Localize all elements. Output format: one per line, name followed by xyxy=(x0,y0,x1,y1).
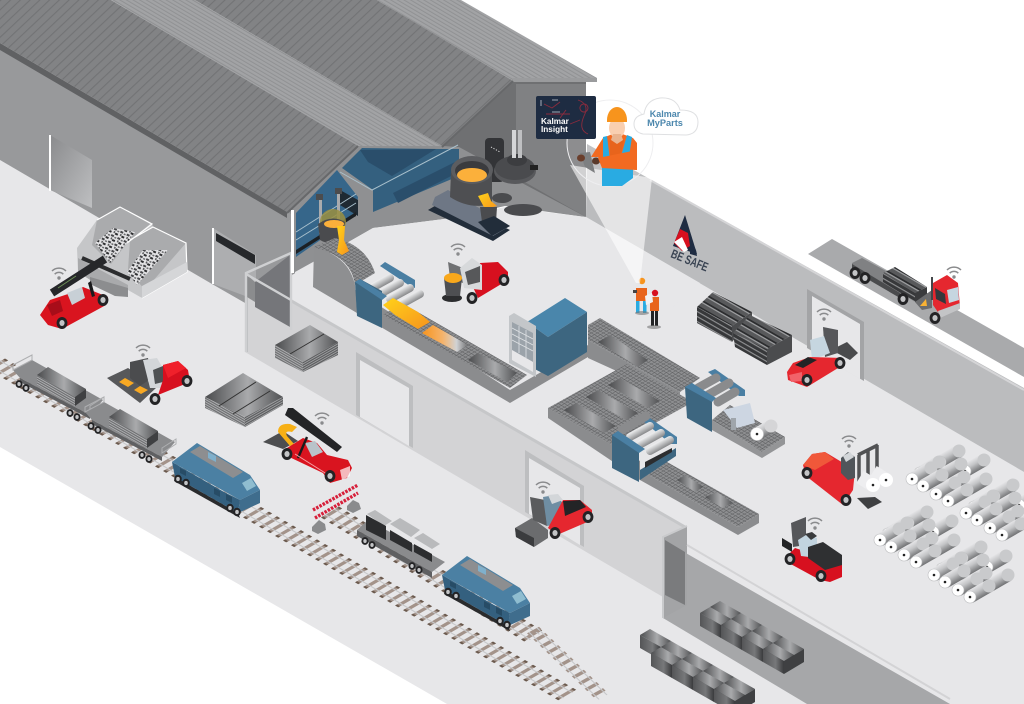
wifi icon xyxy=(536,482,550,494)
roof eave xyxy=(0,43,287,218)
production line: caster conveyor xyxy=(355,262,588,403)
barrier xyxy=(312,485,361,534)
technician callout xyxy=(536,96,698,186)
ladle furnace xyxy=(428,130,542,241)
wifi icon xyxy=(947,267,961,279)
roof upper strip xyxy=(377,0,597,82)
kalmar myparts cloud: MyParts xyxy=(647,118,683,128)
steel bar stacks xyxy=(697,292,792,365)
forklift at right door xyxy=(787,327,858,387)
slab field conveyor xyxy=(548,364,693,446)
wall highlight top xyxy=(650,180,1024,390)
steel block row lower xyxy=(640,629,755,704)
locomotive one xyxy=(172,443,260,518)
black tower and lid xyxy=(485,130,538,184)
wifi icon xyxy=(808,518,822,530)
ladle with molten steel at caster xyxy=(316,188,346,243)
roof panel left xyxy=(0,0,358,212)
continuous caster ramp xyxy=(313,226,375,313)
worker pair xyxy=(633,278,661,329)
wifi icon xyxy=(817,309,831,321)
wifi icon xyxy=(52,268,66,280)
wagon one xyxy=(13,355,104,421)
wifi icon xyxy=(842,436,856,448)
coil pile two xyxy=(960,478,1024,541)
truck on road xyxy=(850,258,960,324)
rolling stand right xyxy=(685,369,755,432)
railway track branch xyxy=(322,507,543,642)
kalmar insight card xyxy=(536,96,596,139)
ground floor xyxy=(0,160,1024,704)
kalmar myparts cloud xyxy=(634,98,698,135)
forklift carrying ladle xyxy=(442,258,509,304)
railway track main xyxy=(0,350,576,700)
spotlight cone xyxy=(570,165,652,283)
kalmar insight card: Kalmar xyxy=(541,117,570,126)
railway switch segment xyxy=(529,628,607,699)
roof gable edges xyxy=(287,81,513,213)
forklift carrying coils xyxy=(802,445,893,509)
lower conveyor xyxy=(640,458,759,527)
finished coil xyxy=(750,420,778,440)
outer storage wall xyxy=(663,540,950,704)
roof valley strip xyxy=(111,0,442,146)
access road xyxy=(808,239,1024,377)
wifi icon xyxy=(451,244,465,256)
reachstacker with grapple xyxy=(263,408,352,483)
coil pile one xyxy=(906,444,992,507)
loading door middle xyxy=(212,228,256,300)
callout circle xyxy=(567,100,653,186)
building: steel mill hall xyxy=(0,0,700,440)
perimeter wall xyxy=(586,144,1024,472)
wagon two xyxy=(85,397,176,463)
coil pile four xyxy=(928,540,1014,603)
forklift with dark load xyxy=(782,517,842,582)
plate forklift xyxy=(107,358,192,405)
scrap bins xyxy=(77,207,187,298)
wagon three with boxes xyxy=(357,510,445,578)
side wall of hall xyxy=(0,45,291,303)
rolling stand lower xyxy=(612,414,677,482)
door two xyxy=(525,450,584,547)
technician xyxy=(577,107,637,186)
annex room xyxy=(245,210,294,352)
blue melting plant xyxy=(296,145,459,257)
forklift with slab at door two xyxy=(515,494,593,547)
reheating furnace xyxy=(509,298,587,377)
corner annex xyxy=(663,526,950,699)
steel plate stacks xyxy=(205,373,283,427)
kalmar insight card: Insight xyxy=(541,125,568,134)
coil pile three xyxy=(874,506,960,568)
be safe sign xyxy=(669,215,710,275)
locomotive two xyxy=(442,556,530,631)
interior floor xyxy=(291,207,700,440)
wifi icon xyxy=(315,413,329,425)
coil conveyor xyxy=(712,405,785,452)
cooling slab xyxy=(468,353,517,382)
blue roller stand xyxy=(355,262,430,329)
loading door left xyxy=(49,135,92,208)
kalmar myparts cloud: Kalmar xyxy=(650,109,681,119)
steel block row upper xyxy=(700,601,804,674)
steel plate stack in annex xyxy=(275,325,338,372)
inner wall with doors xyxy=(245,275,685,610)
interior back wall xyxy=(287,80,585,275)
door one xyxy=(356,352,413,448)
wifi icon xyxy=(136,345,150,357)
conveyor and furnace area xyxy=(509,298,785,535)
roof panel right xyxy=(195,0,513,146)
dark end wall xyxy=(442,82,586,217)
be safe sign: BE SAFE xyxy=(669,247,710,275)
slabs on conveyor xyxy=(564,378,660,433)
reachstacker at scrap bins xyxy=(40,258,130,329)
hot slab xyxy=(422,325,468,352)
door: right wall opening xyxy=(807,289,864,381)
